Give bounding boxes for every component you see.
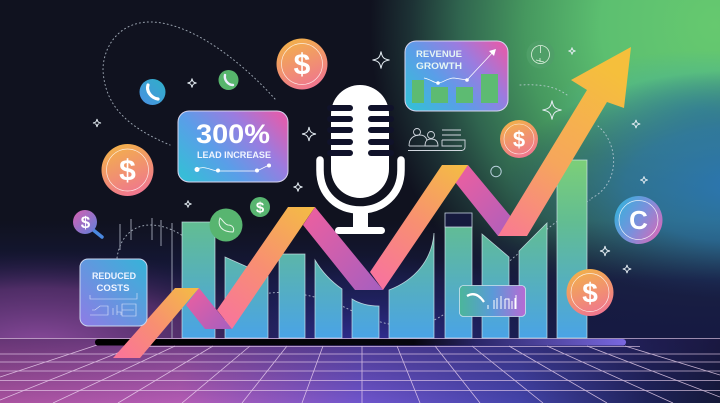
- coin: centre right: [500, 120, 538, 158]
- icon: blue phone: [140, 79, 166, 105]
- vertical tick marks: [120, 218, 172, 338]
- card: 300% lead increase: LEAD INCREASE: [197, 150, 271, 161]
- growth ribbon arrow: [113, 47, 631, 358]
- coin: centre right: $: [513, 127, 525, 152]
- coin: bottom right: [566, 269, 614, 316]
- coin: bottom right: $: [582, 278, 598, 308]
- sparkles: [93, 48, 648, 273]
- coin: left: $: [119, 154, 136, 188]
- coin: left: [102, 144, 154, 196]
- bar chart: [182, 160, 587, 338]
- card: revenue growth: [405, 41, 508, 111]
- card: revenue growth: REVENUE: [416, 49, 462, 60]
- bar outline top: [445, 213, 472, 227]
- card: mini chart: [460, 286, 526, 316]
- card: revenue growth: GROWTH: [416, 61, 462, 72]
- coin: top: $: [294, 48, 311, 82]
- card: 300% lead increase: [178, 111, 288, 182]
- coin: C: C: [629, 205, 648, 235]
- card: reduced costs: [80, 259, 147, 326]
- icon: green phone: [218, 70, 238, 90]
- coin: C: [614, 196, 662, 244]
- icon: magnifier: [73, 210, 102, 237]
- microphone: [320, 85, 401, 234]
- card: reduced costs: COSTS: [96, 283, 130, 293]
- icon: green clock: [526, 40, 554, 68]
- dotted orbit lines: [103, 22, 614, 326]
- card: reduced costs: REDUCED: [92, 271, 136, 281]
- coin: top: [276, 38, 328, 90]
- icon: people and list: [408, 128, 465, 150]
- icon: green dollar: [250, 197, 270, 217]
- icon: magnifier: $: [81, 213, 91, 232]
- icon: green dollar: $: [256, 200, 265, 216]
- floor grid: [0, 338, 720, 403]
- card: 300% lead increase: 300%: [196, 119, 270, 149]
- base platform: [95, 339, 626, 346]
- icon: small ring: [491, 166, 501, 177]
- icon: green bubble: [210, 208, 242, 242]
